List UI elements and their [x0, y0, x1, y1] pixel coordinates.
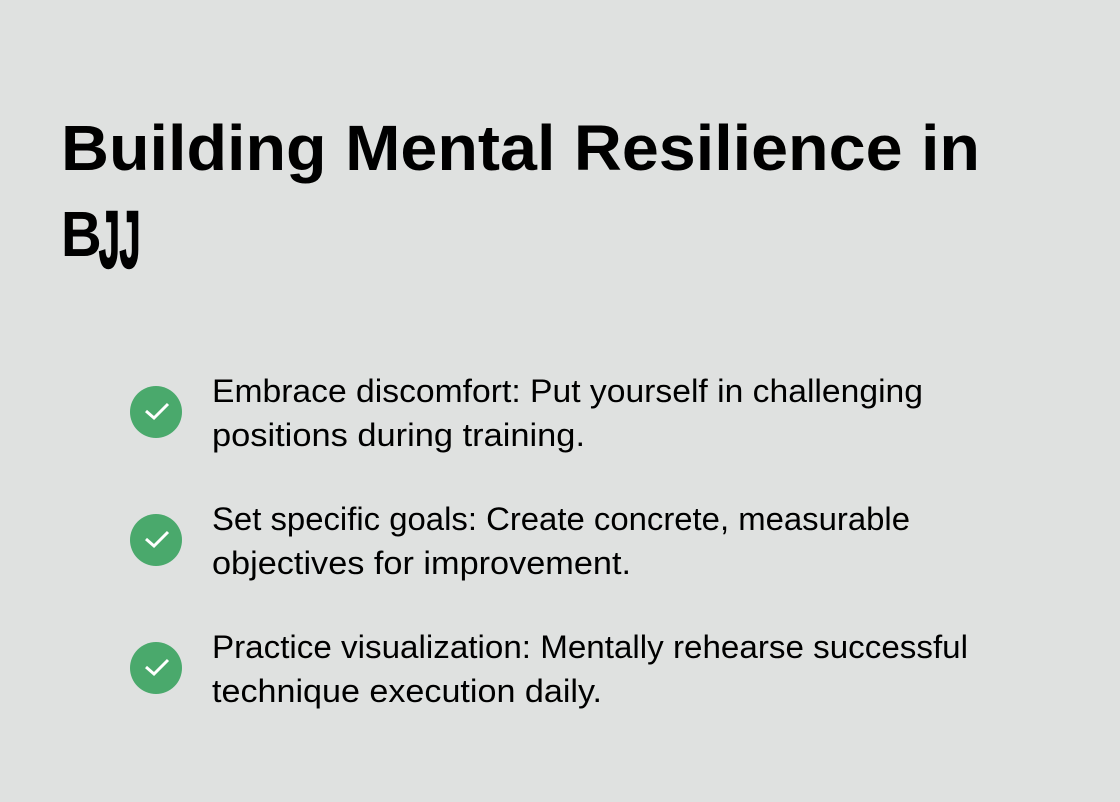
title: JJ — [99, 197, 140, 285]
text: set specific goals: Set specific goals: Create concrete, measurable — [212, 501, 910, 537]
text: practice visualization — [212, 629, 968, 709]
text: embrace discomfort — [212, 373, 923, 453]
icon: check mark — [130, 642, 182, 694]
title: B — [61, 198, 102, 270]
text: practice visualization: technique execution daily. — [212, 673, 602, 709]
list item: set specific goals — [130, 501, 910, 581]
text: embrace discomfort: Embrace discomfort: Put yourself in challenging — [212, 373, 923, 409]
text: embrace discomfort: positions during training. — [212, 417, 585, 453]
icon: check mark — [130, 386, 182, 438]
list item: practice visualization — [130, 629, 968, 709]
text: set specific goals: objectives for improvement. — [212, 545, 631, 581]
text: practice visualization: Practice visualization: Mentally rehearse successful — [212, 629, 968, 665]
title — [61, 112, 980, 285]
text: set specific goals — [212, 501, 910, 581]
list item: embrace discomfort — [130, 373, 923, 453]
icon: check mark — [130, 514, 182, 566]
title: Building Mental Resilience in — [61, 112, 980, 184]
